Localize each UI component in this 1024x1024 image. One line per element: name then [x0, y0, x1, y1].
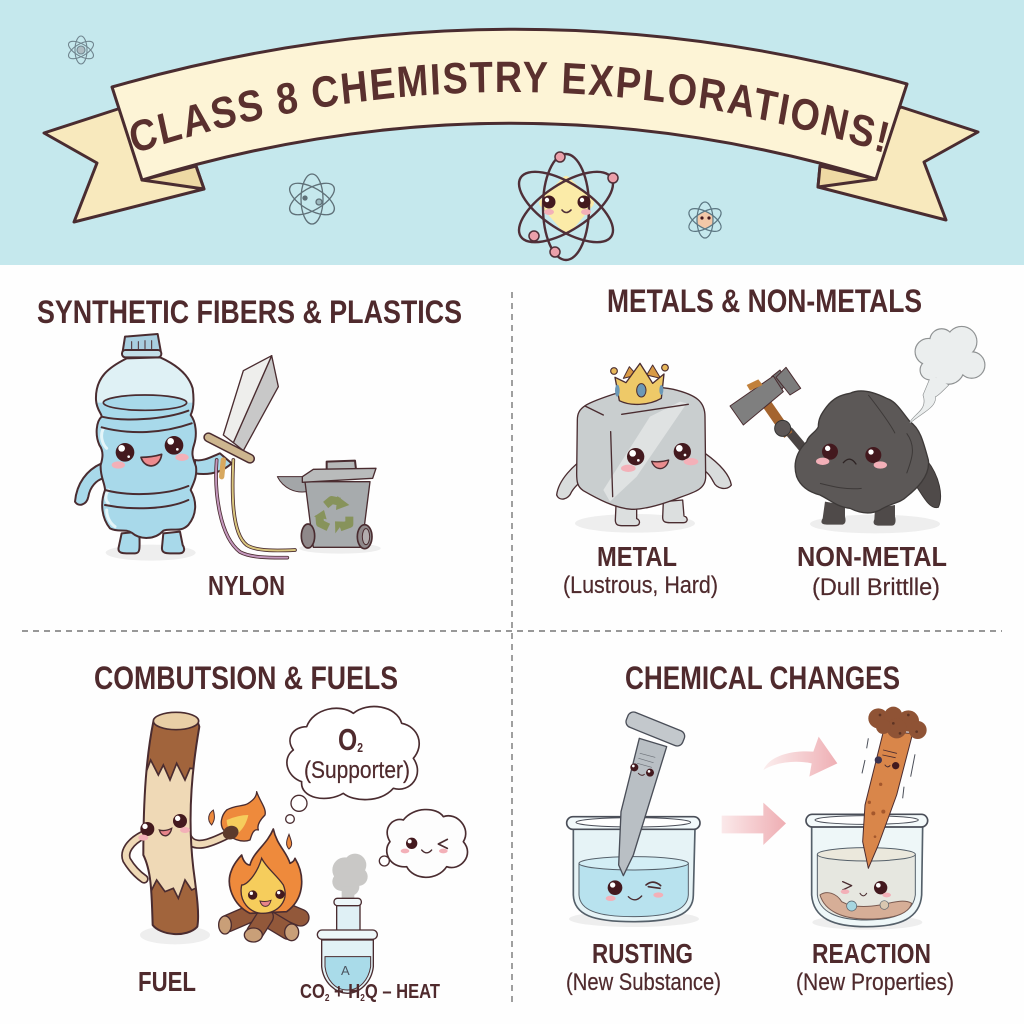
label: non-metal: NON-METAL: [797, 541, 947, 572]
equation: 2: [360, 993, 365, 1004]
label: nylon: NYLON: [208, 570, 285, 601]
icon: left beaker with water: [567, 817, 700, 922]
icon: big smiling atom: [508, 152, 624, 260]
equation: CO: [300, 981, 330, 1003]
icon: iron nail: [619, 710, 686, 876]
icon: crown: [611, 363, 668, 404]
arrow: curved: [763, 737, 837, 777]
shadows: [569, 911, 922, 930]
label: fuel: FUEL: [138, 966, 196, 997]
icon: log character: [126, 708, 227, 942]
caption: metal: (Lustrous, Hard): [563, 572, 718, 599]
icon: flask with smoke: [317, 854, 377, 993]
panel: synthetic fibers and plastics: [37, 294, 462, 601]
caption: reaction: (New Properties): [796, 969, 954, 996]
equation: 2: [325, 993, 330, 1004]
banner right tail: [818, 107, 978, 220]
flask letter: A: [341, 963, 350, 978]
heading: CHEMICAL CHANGES: [625, 660, 900, 696]
header band: [0, 0, 1024, 265]
banner left tail: [44, 108, 204, 222]
icon: small peach atom: [685, 202, 725, 238]
icon: smoke puff: [910, 327, 984, 423]
divider horizontal: [22, 630, 1002, 632]
caption: supporter: (Supporter): [304, 757, 410, 784]
beaker face: [606, 880, 663, 901]
heading: COMBUTSION & FUELS: [94, 660, 398, 696]
left fold: [142, 166, 204, 189]
icon: smiling cloud: [379, 810, 468, 877]
icon: right beaker with sediment: [806, 814, 928, 927]
heading: SYNTHETIC FIBERS & PLASTICS: [37, 294, 462, 330]
icon: metal cube character: [557, 387, 731, 526]
caption: non-metal: (Dull Brittlle): [812, 574, 940, 601]
panel: metals and non-metals: [557, 283, 984, 601]
shadows: [575, 514, 940, 533]
label: reaction: REACTION: [812, 938, 931, 969]
icon: match flame: [209, 792, 292, 849]
equation: Q – HEAT: [365, 981, 440, 1003]
right fold: [818, 166, 876, 187]
equation: + H: [329, 981, 360, 1003]
label: rusting: RUSTING: [592, 938, 693, 969]
illustration: [557, 327, 984, 533]
illustration: [75, 334, 381, 561]
banner main ribbon: [112, 29, 907, 180]
icon: nylon fibers: [216, 460, 295, 558]
icon: recycling bin and anvil: [277, 461, 376, 549]
illustration: [567, 707, 928, 930]
panel: combustion and fuels: [94, 660, 468, 1004]
label: metal: METAL: [597, 541, 677, 572]
caption: rusting: (New Substance): [566, 969, 721, 996]
illustration: [126, 707, 468, 993]
icon: campfire: [219, 829, 302, 942]
divider vertical: [511, 292, 513, 1005]
icon: hammer: [730, 367, 803, 448]
icon: non-metal coal character: [795, 391, 941, 526]
label: oxygen: 2: [357, 740, 363, 755]
shadows: [106, 543, 381, 561]
heading: METALS & NON-METALS: [607, 283, 922, 319]
title banner: [42, 28, 980, 224]
icon: thought cloud oxygen: [286, 707, 419, 823]
arrow: straight: [722, 803, 786, 845]
icon: rusted nail: [862, 707, 927, 868]
shadow: [140, 926, 210, 944]
icon: sword: [208, 356, 278, 477]
icon: small atom top left: [66, 36, 96, 64]
right beaker face: [841, 881, 891, 897]
icon: outline atom: [285, 174, 339, 224]
label: oxygen: O: [338, 722, 362, 757]
icon: bottle character: [75, 334, 232, 553]
title text: CLASS 8 CHEMISTRY EXPLORATIONS!: [130, 62, 888, 152]
panel: chemical changes: [566, 660, 954, 996]
